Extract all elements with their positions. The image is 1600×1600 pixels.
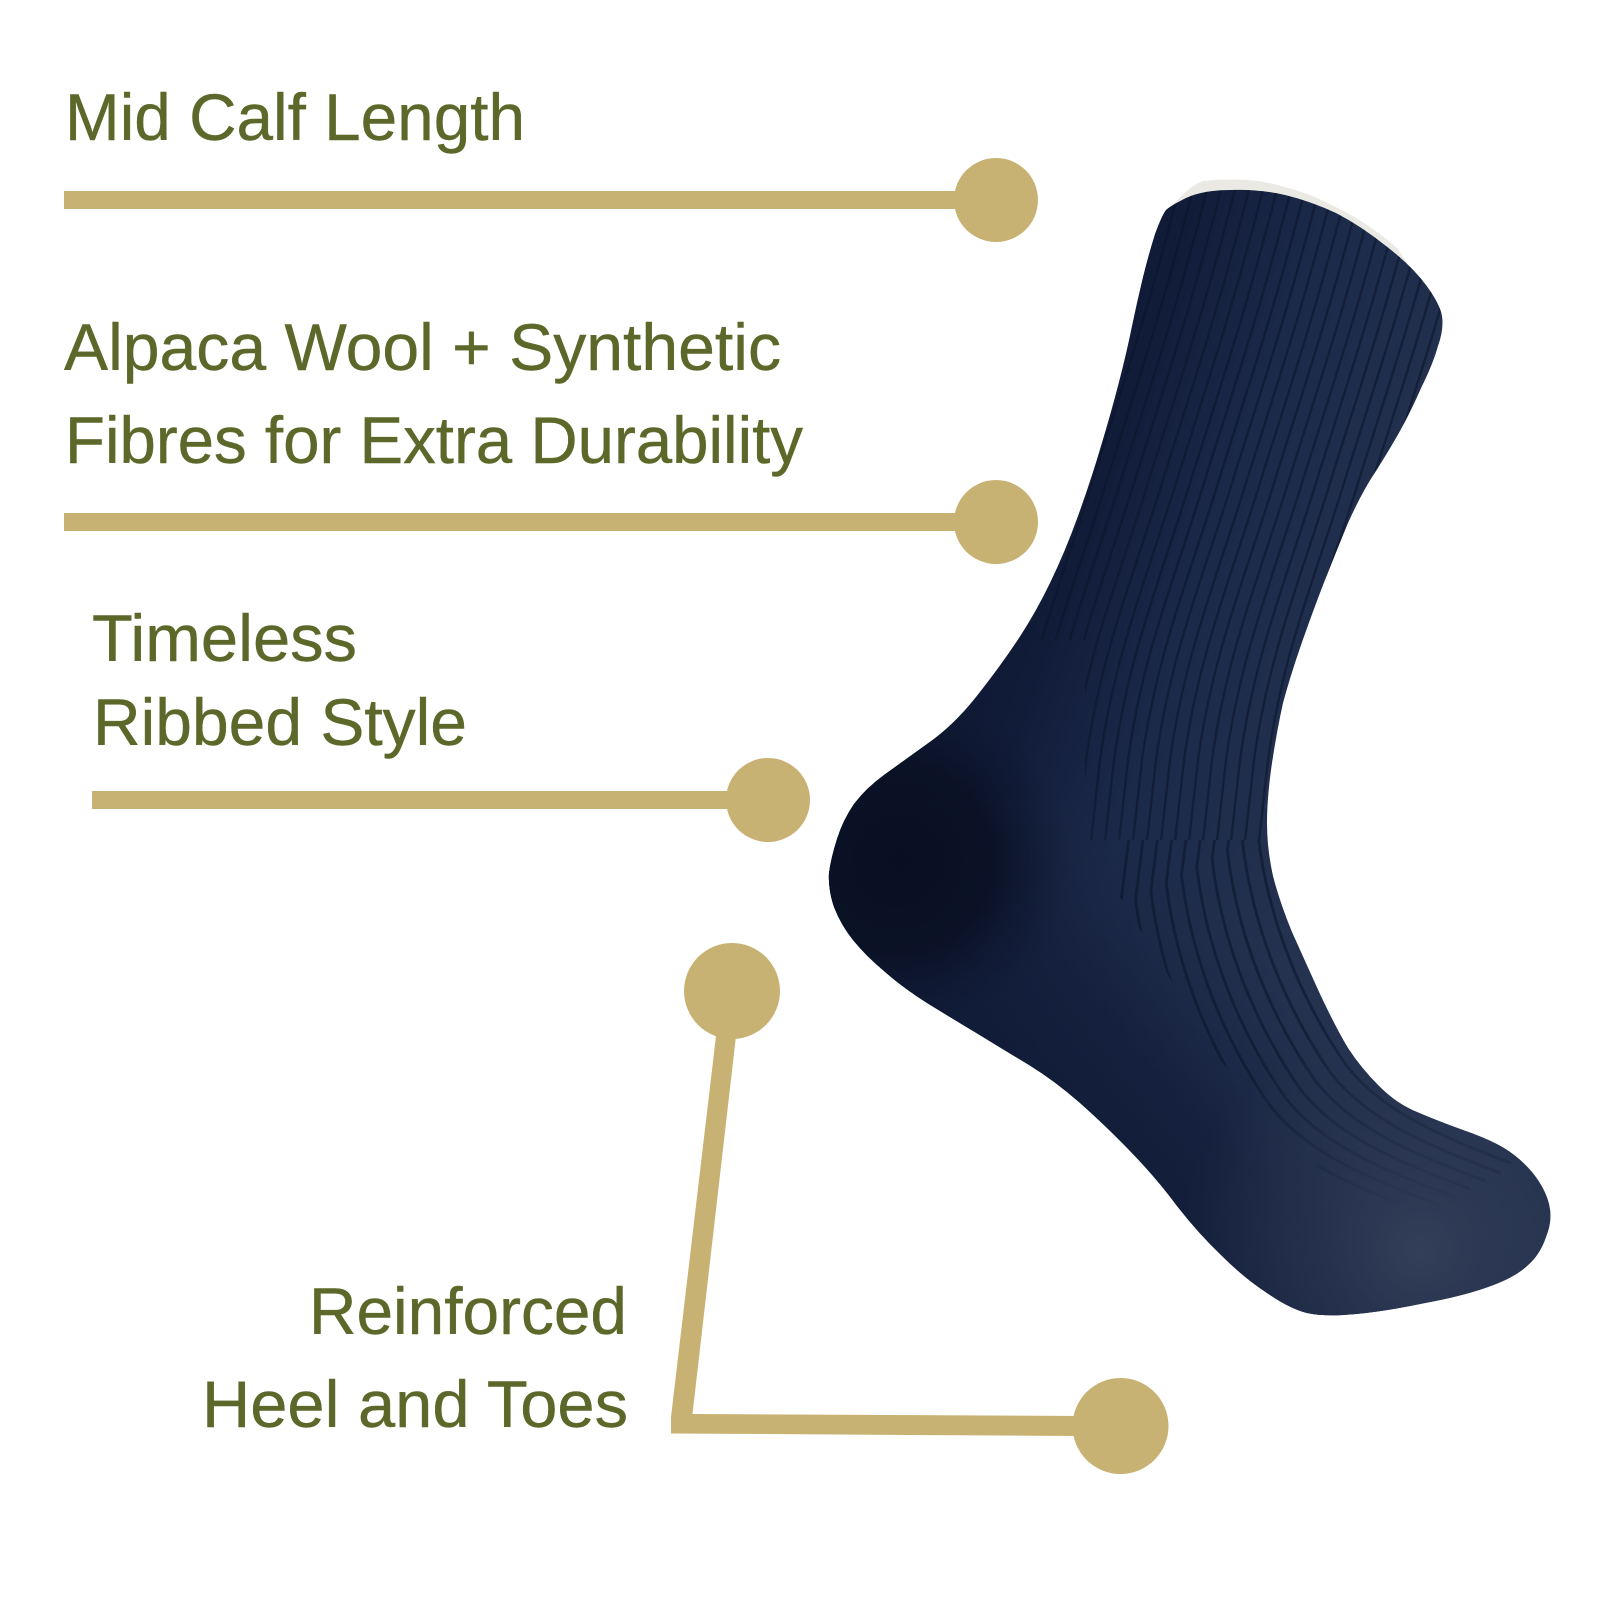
leg ribbing xyxy=(1041,190,1441,840)
leader line xyxy=(64,513,964,531)
label: Timeless xyxy=(92,601,357,675)
label: Fibres for Extra Durability xyxy=(65,403,803,477)
heel dark patch xyxy=(828,716,1034,1005)
sock white inner cuff xyxy=(1168,180,1412,270)
toe tint xyxy=(1232,1051,1550,1316)
label: Alpaca Wool + Synthetic xyxy=(64,310,781,384)
toe marker dot xyxy=(1072,1378,1168,1474)
label: Reinforced xyxy=(309,1274,627,1348)
heel marker dot xyxy=(684,943,780,1039)
callout: ribbed style xyxy=(92,601,810,842)
callout: reinforced heel and toes xyxy=(202,943,1168,1474)
foot shading xyxy=(828,800,1512,1316)
label: Ribbed Style xyxy=(93,685,467,759)
leader line xyxy=(92,791,752,809)
label xyxy=(92,601,467,759)
marker dot xyxy=(954,480,1038,564)
label: Heel and Toes xyxy=(202,1367,628,1441)
marker dot xyxy=(726,758,810,842)
callout: mid calf length xyxy=(64,80,1038,242)
elbow leader line xyxy=(671,1036,1080,1436)
marker dot xyxy=(954,158,1038,242)
label: Mid Calf Length xyxy=(65,80,525,154)
callout: alpaca wool xyxy=(64,310,1038,564)
sock body xyxy=(828,190,1550,1316)
label xyxy=(64,310,803,477)
sock photo illustration xyxy=(828,180,1550,1316)
leader line xyxy=(64,191,964,209)
label xyxy=(202,1274,628,1441)
foot ribbing xyxy=(1120,840,1511,1164)
